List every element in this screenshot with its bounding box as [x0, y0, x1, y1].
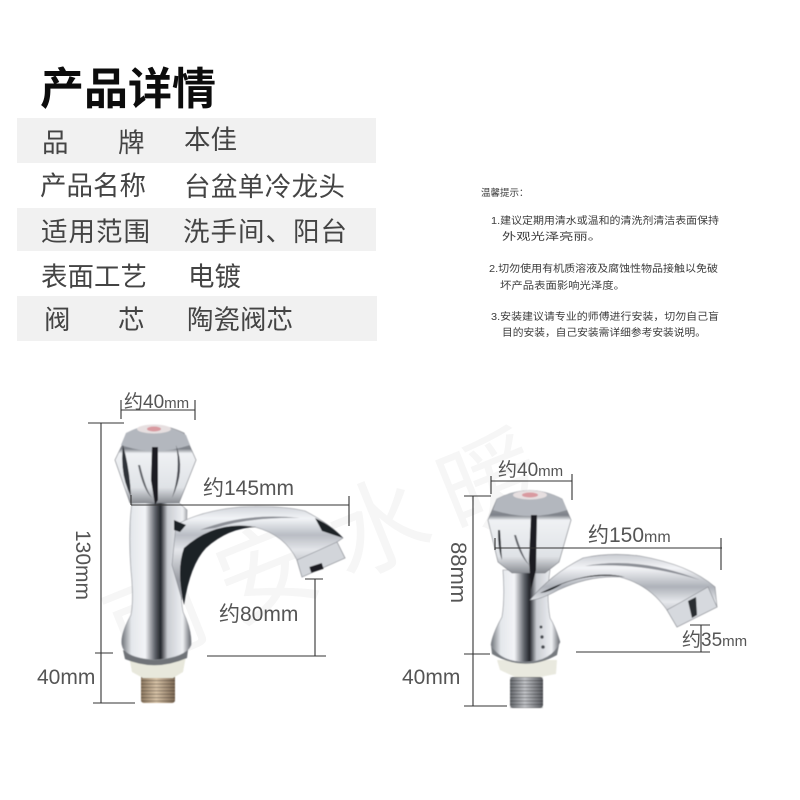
faucet 1 dimensions [88, 400, 349, 703]
grey washer [491, 645, 559, 664]
threaded connector [510, 677, 543, 708]
faucet 1 labels: 约40mm [124, 391, 189, 413]
row: applicable area: 适用范围 [41, 217, 150, 247]
row: brand: 品 [42, 128, 68, 158]
dimension: reach 145 [131, 495, 349, 526]
plastic nut [129, 656, 186, 678]
watermark: 南安水暖 [89, 406, 576, 689]
row: valve core: 阀 [44, 305, 70, 335]
row: surface finish [41, 262, 241, 292]
title: 产品详情 [40, 65, 216, 114]
body dots [540, 626, 545, 649]
row: surface finish: 电镀 [188, 262, 241, 292]
care tips: 3.安装建议请专业的师傅进行安装，切勿自己盲 [491, 310, 719, 323]
row: valve core: 陶瓷阀芯 [187, 305, 293, 335]
faucet 2 labels: 约40mm [498, 459, 563, 481]
row: valve core [17, 296, 377, 341]
care tips: 坏产品表面影响光泽度。 [500, 279, 625, 292]
faucet 2 labels: 约150mm [588, 524, 671, 547]
faucet 2 labels: 约35mm [682, 629, 747, 651]
dimension: height 88 [464, 496, 507, 706]
spout [172, 506, 345, 600]
dimension: clearance 80 [207, 579, 326, 656]
row: product name: 产品名称 [40, 171, 146, 201]
dimension: width 40 [491, 474, 572, 500]
plastic nut [497, 660, 557, 677]
row: surface finish: 表面工艺 [41, 262, 147, 292]
body [122, 502, 191, 660]
row: product name: 台盆单冷龙头 [184, 172, 345, 202]
handle [115, 424, 196, 505]
row: applicable area: 洗手间、阳台 [183, 217, 347, 247]
faucet 1 labels: 40mm [37, 666, 95, 689]
spout shadow [540, 575, 625, 593]
care tips: 温馨提示： [481, 187, 529, 199]
faucet 1 labels: 约145mm [203, 477, 294, 500]
row: brand: 本佳 [184, 125, 237, 155]
handle [488, 490, 571, 590]
dimension: reach 150 [495, 538, 722, 570]
body [491, 570, 560, 662]
spec table [17, 118, 377, 341]
faucet 2 labels [402, 459, 747, 689]
faucet 1 labels: 约80mm [219, 603, 298, 626]
care tips: 2.切勿使用有机质溶液及腐蚀性物品接触以免破 [489, 262, 718, 275]
dimension: clearance 35 [576, 625, 710, 652]
threaded connector [141, 673, 175, 703]
row: applicable area [17, 208, 376, 251]
spout shadow [180, 526, 256, 605]
care tips: 1.建议定期用清水或温和的清洗剂清洁表面保持 [491, 214, 719, 227]
grey washer [123, 650, 188, 665]
faucet 1 labels: 130mm [71, 530, 94, 600]
faucet 2 labels: 40mm [402, 666, 460, 689]
aerator [297, 542, 345, 577]
faucet 2 [488, 490, 717, 708]
care tips [481, 187, 719, 339]
dimension: width 40 [121, 400, 195, 420]
row: valve core: 芯 [118, 305, 144, 335]
row: product name [40, 171, 345, 202]
faucet 1 [115, 424, 345, 703]
faucet 1 labels [37, 391, 298, 689]
aerator [667, 587, 717, 627]
care tips: 目的安装，自己安装需详细参考安装说明。 [502, 326, 706, 339]
spout [530, 554, 717, 627]
faucet 2 dimensions [464, 474, 722, 706]
faucet 2 labels: 88mm [446, 542, 471, 603]
row: brand: 牌 [118, 128, 144, 158]
dimension: height 130 [88, 423, 135, 703]
care tips: 外观光泽亮丽。 [502, 230, 602, 243]
row: brand [17, 118, 376, 163]
